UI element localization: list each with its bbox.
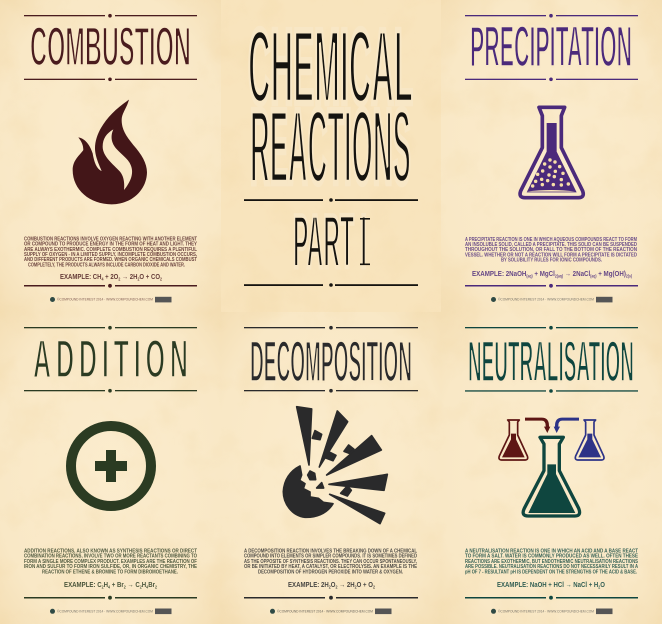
text: combustion example: 2	[137, 276, 140, 282]
text: combustion description: ARE ALWAYS EXOTHERMIC. COMPLETE COMBUSTION REQUIRES A PLENTIFUL	[24, 247, 197, 253]
rule: addition top	[24, 326, 197, 330]
text: addition example: + Br	[110, 580, 124, 589]
rule: addition bottom	[24, 596, 197, 600]
panel: combustion	[24, 14, 197, 302]
text: combustion example: O + CO	[139, 272, 160, 281]
heading: decomposition: DECOMPOSITION	[250, 331, 412, 395]
text: decomposition description: COMPOUND INTO ELEMENTS OR SIMPLER COMPOUNDS. IT IS SOMETIMES DEFINED	[244, 554, 417, 560]
text: decomposition example: O	[331, 580, 336, 589]
text: addition description: FORM A SINGLE MORE COMPLEX PRODUCT. EXAMPLES ARE THE REACTION OF	[24, 559, 197, 565]
footer: combustion credit: ©COMPOUND INTEREST 2014 · WWW.COMPOUNDCHEM.COM	[57, 298, 153, 302]
rule: decomposition top	[244, 326, 418, 330]
heading: part I: PART I	[293, 199, 367, 283]
text: addition description: ADDITION REACTIONS, ALSO KNOWN AS SYNTHESIS REACTIONS OR DIRECT	[24, 548, 197, 554]
panel: precipitation	[465, 14, 638, 302]
rule: decomposition below heading	[244, 389, 418, 393]
text: combustion example: → 2H	[120, 272, 137, 281]
text: precipitation example: 2(s)	[626, 274, 632, 278]
text: precipitation description: BY SOLUBILITY RULES FOR IONIC COMPOUNDS.	[501, 258, 602, 264]
rule: combustion top	[24, 14, 197, 18]
text: addition example: Br	[148, 580, 155, 589]
text: combustion example: + 2O	[103, 272, 118, 281]
text: neutralisation example: EXAMPLE: NaOH + HCl → NaCl + H	[497, 580, 624, 589]
text: addition description: COMBINATION REACTIONS, INVOLVE TWO OR MORE REACTANTS COMBINING TO	[24, 554, 197, 560]
text: decomposition example: → 2H	[337, 580, 355, 589]
rule: neutralisation top	[465, 326, 638, 330]
icon: acid flask	[499, 420, 528, 460]
text: decomposition example: 2	[373, 584, 375, 590]
text: addition description	[24, 548, 197, 575]
text: combustion example: EXAMPLE: CH	[60, 272, 112, 281]
icon: flame	[73, 100, 147, 204]
text: precipitation example: + Mg(OH)	[596, 269, 626, 278]
text: addition example: 2	[155, 584, 157, 590]
heading: neutralisation: NEUTRALISATION	[468, 331, 634, 395]
footer: decomposition credit	[270, 608, 392, 614]
text: precipitation example: + MgCl	[533, 269, 555, 278]
text: combustion description: COMPLETELY, THE PRODUCTS ALWAYS INCLUDE CARBON DIOXIDE AND WATER.	[28, 262, 185, 268]
text: decomposition description: DECOMPOSITION OF HYDROGEN PEROXIDE INTO WATER & OXYGEN.	[258, 569, 403, 575]
text: precipitation example: EXAMPLE: 2NaOH	[472, 269, 539, 278]
rule: precipitation bottom	[465, 284, 638, 288]
rule: title lower	[244, 283, 418, 287]
text: decomposition description: OR BE INITIATED BY HEAT, A CATALYST, OR ELECTROLYSIS. AN EXAMPLE IS THE	[244, 564, 417, 570]
text: neutralisation description	[465, 548, 638, 575]
text: decomposition example: O + O	[357, 580, 373, 589]
text: decomposition description: AS THE OPPOSITE OF SYNTHESIS REACTIONS. THEY CAN OCCUR SPONTANEOUSLY,	[244, 559, 417, 565]
rule: combustion bottom	[24, 284, 197, 288]
icon: neutralisation flasks	[499, 418, 604, 516]
heading: reactions: REACTIONS	[250, 89, 411, 206]
text: decomposition description: A DECOMPOSITION REACTION INVOLVES THE BREAKING DOWN OF A CHEMICAL	[244, 548, 417, 554]
text: decomposition example: 2	[355, 584, 357, 590]
icon: explosion	[283, 407, 387, 524]
rule: precipitation below heading	[465, 78, 638, 81]
text: combustion description: COMBUSTION REACTIONS INVOLVE OXYGEN REACTING WITH ANOTHER ELEMENT	[24, 236, 197, 242]
text: addition description: IRON AND SULFUR TO FORM IRON SULFIDE, OR, IN ORGANIC CHEMISTRY, THE	[24, 564, 197, 570]
arrow: base to salt flask	[554, 418, 579, 433]
footer: addition credit	[50, 608, 172, 614]
text: combustion description	[24, 236, 197, 268]
footer: neutralisation credit: ©COMPOUND INTEREST 2014 · WWW.COMPOUNDCHEM.COM	[498, 610, 594, 614]
rule: precipitation top	[465, 14, 638, 18]
footer: addition credit: ©COMPOUND INTEREST 2014 · WWW.COMPOUNDCHEM.COM	[57, 610, 153, 614]
rule: combustion below heading	[24, 78, 197, 81]
text: addition example: 2	[102, 584, 104, 590]
text: addition example: H	[104, 580, 108, 589]
footer: combustion credit	[50, 297, 172, 302]
heading: combustion: COMBUSTION	[30, 16, 191, 78]
text: addition example: → C	[126, 580, 140, 589]
panel: decomposition	[244, 326, 418, 614]
text: addition example: 2	[124, 584, 126, 590]
text: precipitation description	[465, 237, 637, 264]
text: addition example: 4	[146, 584, 149, 590]
icon: plus in circle	[71, 426, 151, 506]
rule: neutralisation bottom	[465, 596, 638, 600]
rule: neutralisation below heading	[465, 389, 638, 393]
text: precipitation example: → 2NaCl	[563, 269, 590, 278]
panel: title	[244, 7, 418, 287]
text: precipitation example: 2(aq)	[555, 274, 564, 278]
footer: decomposition credit: ©COMPOUND INTEREST 2014 · WWW.COMPOUNDCHEM.COM	[277, 610, 373, 614]
text: decomposition example: EXAMPLE: 2H	[288, 580, 339, 589]
text: neutralisation example: 2	[598, 584, 601, 590]
footer: neutralisation credit	[491, 608, 612, 614]
rule: decomposition bottom	[244, 596, 418, 600]
heading: precipitation: PRECIPITATION	[470, 15, 632, 79]
panel: addition	[24, 326, 197, 614]
text: combustion description: SUPPLY OF OXYGEN - IN A LIMITED SUPPLY, INCOMPLETE COMBUSTION OCCURS,	[24, 252, 197, 258]
arrow: acid to salt flask	[525, 418, 550, 433]
text: combustion example: 2	[118, 276, 121, 282]
text: precipitation example: (aq)	[590, 274, 597, 278]
panel: neutralisation	[465, 326, 638, 614]
text: neutralisation example: O	[600, 580, 605, 589]
icon: base flask	[575, 420, 604, 460]
text: decomposition example: 2	[329, 584, 331, 590]
heading: addition: ADDITION	[33, 330, 188, 390]
text: addition example: 2	[140, 584, 142, 590]
text: combustion description: OR COMPOUND TO PRODUCE ENERGY IN THE FORM OF HEAT AND LIGHT. THEY	[24, 242, 197, 248]
text: combustion example: 2	[160, 276, 162, 282]
text: addition example: EXAMPLE: C	[64, 580, 111, 589]
text: addition example: H	[142, 580, 146, 589]
text: addition description: REACTION OF ETHENE & BROMINE TO FORM DIBROMOETHANE.	[42, 569, 178, 575]
text: decomposition description	[244, 548, 417, 575]
text: combustion example: 4	[101, 276, 104, 282]
icon: flask with precipitate	[520, 107, 583, 198]
text: precipitation example: (aq)	[526, 274, 533, 278]
footer: precipitation credit: ©COMPOUND INTEREST 2014 · WWW.COMPOUNDCHEM.COM	[498, 298, 594, 302]
heading: chemical: CHEMICAL	[248, 7, 413, 126]
text: combustion description: AND DIFFERENT PRODUCTS ARE FORMED. WHEN ORGANIC CHEMICALS COMBUST	[24, 257, 197, 263]
icon: salt flask	[523, 437, 580, 516]
text: addition example: 4	[108, 584, 110, 590]
text: decomposition example: 2	[335, 584, 338, 590]
rule: title upper	[244, 198, 418, 202]
footer: precipitation credit	[491, 297, 612, 302]
rule: addition below heading	[24, 389, 197, 393]
